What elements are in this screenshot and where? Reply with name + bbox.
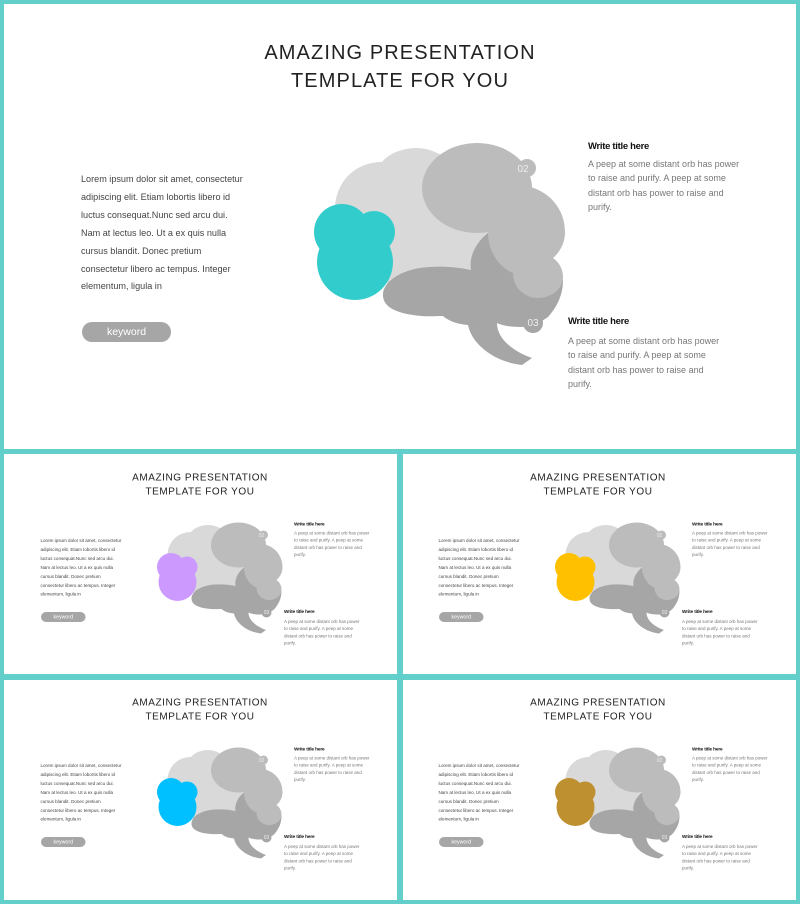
text block: lorem ipsum: cursus blandit. Donec pretium — [438, 574, 499, 579]
text block: lorem ipsum: adipiscing elit. Etiam lobortis libero id — [81, 192, 230, 202]
text block: lorem ipsum: luctus consequat.Nunc sed arcu dui. — [438, 556, 512, 561]
text block: item 02: A peep at some distant orb has power — [692, 530, 768, 536]
text block: item 02: Write title here — [294, 746, 325, 752]
title — [530, 472, 666, 497]
title: AMAZING PRESENTATION — [132, 697, 268, 708]
text block: lorem ipsum: Lorem ipsum dolor sit amet, consectetur — [438, 763, 519, 768]
keyword button: keyword — [107, 326, 146, 338]
panel: blue slide — [40, 697, 370, 870]
text block: item 03: to raise and purify. A peep at some — [284, 851, 353, 856]
text block: item 03: Write title here — [682, 609, 713, 614]
text block: lorem ipsum: consectetur libero ac tempus. Integer — [40, 583, 115, 588]
text block: item 03: purify. — [284, 865, 296, 870]
text block: lorem ipsum: consectetur libero ac tempus. Integer — [438, 808, 513, 813]
text block: item 02: distant orb has power to raise and — [692, 770, 760, 775]
title — [132, 697, 268, 722]
title: TEMPLATE FOR YOU — [145, 486, 254, 497]
text block: lorem ipsum: elementum, ligula in — [438, 592, 479, 597]
text block: item 02: to raise and purify. A peep at some — [588, 173, 726, 183]
text block: lorem ipsum — [40, 538, 122, 597]
text block: lorem ipsum: luctus consequat.Nunc sed arcu dui. — [438, 781, 512, 786]
brain diagram — [555, 522, 680, 634]
panel: main slide — [81, 42, 739, 389]
text block: lorem ipsum: cursus blandit. Donec pretium — [40, 574, 101, 579]
title: AMAZING PRESENTATION — [264, 42, 536, 64]
text block: lorem ipsum: luctus consequat.Nunc sed arcu dui. — [40, 556, 114, 561]
keyword button — [439, 612, 484, 622]
text block: item 02 — [692, 746, 768, 782]
text block: lorem ipsum: elementum, ligula in — [40, 817, 81, 822]
text block: item 02 — [588, 141, 739, 212]
text block: item 03: A peep at some distant orb has power — [284, 619, 360, 624]
text block: item 02 — [294, 522, 370, 557]
text block: item 02: Write title here — [588, 141, 649, 152]
text block: item 02 — [692, 522, 768, 557]
text block: lorem ipsum: cursus blandit. Donec pretium — [438, 799, 499, 804]
text block: item 02: purify. — [588, 202, 612, 212]
text block: item 02: purify. — [692, 552, 704, 557]
text block: item 03: A peep at some distant orb has power — [682, 619, 758, 624]
brain diagram — [157, 748, 282, 858]
text block: item 03: distant orb has power to raise and — [682, 858, 750, 863]
text block: item 03: distant orb has power to raise and — [284, 858, 352, 863]
text block: item 03: distant orb has power to raise and — [568, 365, 704, 375]
text block: item 03: Write title here — [568, 316, 629, 327]
text block: item 02: to raise and purify. A peep at some — [294, 538, 363, 543]
text block: lorem ipsum: luctus consequat.Nunc sed arcu dui. — [81, 210, 228, 220]
keyword button: keyword — [53, 839, 73, 845]
text block: item 02: A peep at some distant orb has power — [294, 756, 370, 760]
text block: lorem ipsum: Nam at lectus leo. Ut a ex quis nulla — [40, 565, 113, 570]
panel: purple slide background — [4, 454, 397, 674]
brain diagram — [157, 522, 282, 634]
title: AMAZING PRESENTATION — [132, 472, 268, 483]
text block: item 02: purify. — [294, 552, 306, 557]
title — [530, 697, 666, 722]
text block: item 02: Write title here — [692, 746, 723, 752]
text block: item 03: Write title here — [284, 609, 315, 614]
text block: lorem ipsum: consectetur libero ac tempus. Integer — [81, 264, 231, 274]
text block: item 02: purify. — [692, 777, 704, 782]
text block: item 03 — [284, 609, 360, 646]
text block: item 03: to raise and purify. A peep at some — [682, 851, 751, 856]
text block: item 02: purify. — [294, 777, 306, 782]
title — [264, 42, 536, 92]
panel: main slide background — [4, 4, 796, 449]
brain diagram — [555, 748, 680, 858]
text block: lorem ipsum: Lorem ipsum dolor sit amet, consectetur — [81, 174, 243, 184]
text block: item 02: A peep at some distant orb has power — [692, 756, 768, 760]
text block: lorem ipsum: elementum, ligula in — [81, 281, 162, 291]
text block: item 03: purify. — [682, 640, 694, 645]
text block: item 02: A peep at some distant orb has power — [294, 530, 370, 536]
text block: lorem ipsum: adipiscing elit. Etiam lobortis libero id — [40, 772, 115, 777]
title — [132, 472, 268, 497]
keyword button — [41, 837, 86, 847]
text block: lorem ipsum — [438, 538, 520, 597]
title: AMAZING PRESENTATION — [530, 697, 666, 708]
title: AMAZING PRESENTATION — [530, 472, 666, 483]
text block: lorem ipsum: adipiscing elit. Etiam lobortis libero id — [438, 772, 513, 777]
keyword button — [41, 612, 86, 622]
text block: item 03: to raise and purify. A peep at some — [568, 350, 706, 360]
keyword button: keyword — [53, 614, 73, 620]
text block: lorem ipsum: Nam at lectus leo. Ut a ex quis nulla — [438, 565, 511, 570]
text block: lorem ipsum: elementum, ligula in — [438, 817, 479, 822]
panel: yellow slide background — [403, 454, 796, 674]
text block: item 03: Write title here — [284, 834, 315, 840]
text block: item 02: Write title here — [692, 522, 723, 527]
text block: item 03 — [284, 834, 360, 870]
text block: item 03: purify. — [682, 865, 694, 870]
text block: item 03: A peep at some distant orb has power — [568, 336, 719, 346]
text block: lorem ipsum: consectetur libero ac tempus. Integer — [438, 583, 513, 588]
title: TEMPLATE FOR YOU — [543, 486, 652, 497]
text block: item 03: distant orb has power to raise and — [284, 633, 352, 638]
brain diagram — [314, 143, 565, 365]
text block: item 02: A peep at some distant orb has power — [588, 159, 739, 169]
text block: lorem ipsum: consectetur libero ac tempus. Integer — [40, 808, 115, 813]
text block: lorem ipsum: Lorem ipsum dolor sit amet, consectetur — [40, 538, 121, 543]
keyword button — [82, 322, 171, 342]
text block: item 02: to raise and purify. A peep at some — [692, 763, 761, 768]
text block: lorem ipsum: cursus blandit. Donec pretium — [40, 799, 101, 804]
text block: item 03 — [682, 609, 758, 646]
keyword button: keyword — [451, 614, 471, 620]
text block: lorem ipsum: Nam at lectus leo. Ut a ex quis nulla — [438, 790, 511, 795]
keyword button: keyword — [451, 839, 471, 845]
panel: yellow slide — [438, 472, 768, 646]
text block: item 03: to raise and purify. A peep at some — [284, 626, 353, 631]
text block: item 03 — [568, 316, 719, 389]
panel: ochre slide background — [403, 680, 796, 900]
text block: lorem ipsum: adipiscing elit. Etiam lobortis libero id — [438, 547, 513, 552]
text block: item 03: to raise and purify. A peep at some — [682, 626, 751, 631]
text block: item 03: A peep at some distant orb has power — [284, 844, 360, 849]
panel: ochre slide — [438, 697, 768, 870]
text block: item 03: A peep at some distant orb has power — [682, 844, 758, 849]
text block: item 02: to raise and purify. A peep at some — [294, 763, 363, 768]
text block: lorem ipsum: adipiscing elit. Etiam lobortis libero id — [40, 547, 115, 552]
text block: lorem ipsum — [81, 174, 243, 291]
text block: lorem ipsum — [40, 763, 122, 822]
text block: item 03 — [682, 834, 758, 870]
panel: blue slide background — [4, 680, 397, 900]
text block: item 02: to raise and purify. A peep at some — [692, 538, 761, 543]
title: TEMPLATE FOR YOU — [145, 711, 254, 722]
title: TEMPLATE FOR YOU — [543, 711, 652, 722]
text block: lorem ipsum: luctus consequat.Nunc sed arcu dui. — [40, 781, 114, 786]
text block: item 02 — [294, 746, 370, 782]
text block: item 03: purify. — [568, 379, 592, 389]
title: TEMPLATE FOR YOU — [291, 70, 509, 92]
text block: lorem ipsum: Lorem ipsum dolor sit amet, consectetur — [40, 763, 121, 768]
text block: item 02: Write title here — [294, 522, 325, 527]
text block: item 02: distant orb has power to raise and — [588, 188, 724, 198]
text block: lorem ipsum — [438, 763, 520, 822]
text block: lorem ipsum: Nam at lectus leo. Ut a ex quis nulla — [81, 228, 226, 238]
text block: lorem ipsum: cursus blandit. Donec pretium — [81, 246, 201, 256]
text block: item 03: Write title here — [682, 834, 713, 840]
text block: lorem ipsum: Lorem ipsum dolor sit amet, consectetur — [438, 538, 519, 543]
text block: item 03: distant orb has power to raise and — [682, 633, 750, 638]
text block: lorem ipsum: elementum, ligula in — [40, 592, 81, 597]
panel: purple slide — [40, 472, 370, 646]
text block: item 03: purify. — [284, 640, 296, 645]
text block: item 02: distant orb has power to raise and — [294, 545, 362, 550]
text block: item 02: distant orb has power to raise and — [294, 770, 362, 775]
text block: lorem ipsum: Nam at lectus leo. Ut a ex quis nulla — [40, 790, 113, 795]
text block: item 02: distant orb has power to raise and — [692, 545, 760, 550]
keyword button — [439, 837, 484, 847]
